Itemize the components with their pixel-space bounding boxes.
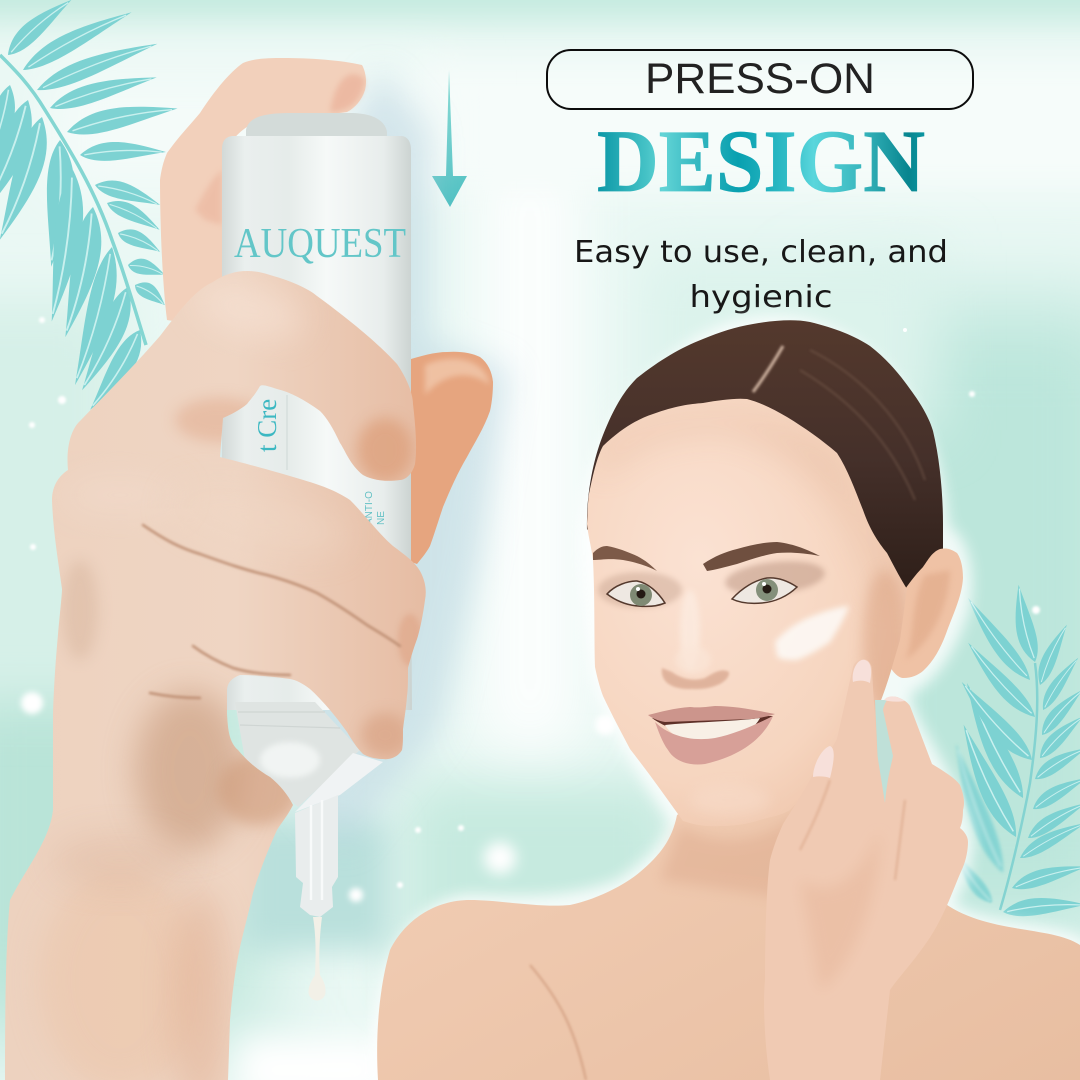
nozzle xyxy=(295,795,338,917)
bottle xyxy=(222,113,412,1000)
nose xyxy=(662,646,729,689)
subtitle: hygienic xyxy=(690,280,832,315)
clear bottle neck xyxy=(235,702,360,807)
ear xyxy=(890,548,963,678)
woman xyxy=(377,320,1080,1080)
bottle small print xyxy=(364,491,387,525)
gap between fingers xyxy=(875,700,895,810)
arrow: press down xyxy=(432,70,467,207)
chest crease xyxy=(530,965,586,1080)
hand on cheek xyxy=(764,659,968,1080)
label pill: PRESS-ON xyxy=(547,50,973,109)
leaf: right palm xyxy=(944,583,1080,918)
hair parting xyxy=(753,346,783,392)
eyebrows xyxy=(593,546,657,571)
hand front: fingers, palm and forearm xyxy=(5,271,426,1080)
bottle small print: ANTI-O xyxy=(364,491,375,525)
bottle brand: AUQUEST xyxy=(234,221,406,267)
hand shading xyxy=(800,830,880,990)
subtitle: Easy to use, clean, and xyxy=(574,235,948,270)
woman glow xyxy=(378,322,1080,1080)
face xyxy=(587,399,907,826)
leaf: top left palm xyxy=(0,0,179,417)
forehead shadow xyxy=(620,418,876,564)
under-eye cream xyxy=(775,606,849,660)
bottle label fragment: t Cre xyxy=(252,399,282,452)
hair xyxy=(587,320,943,595)
subtitle xyxy=(574,235,948,315)
eyes xyxy=(607,578,797,606)
hand back: thumb and fingertip behind bottle xyxy=(160,58,493,564)
finger creases xyxy=(143,525,400,698)
hand shading xyxy=(135,690,245,850)
lips xyxy=(648,706,775,764)
neck shadow xyxy=(660,810,800,900)
bottle cap xyxy=(246,113,387,140)
background sparkles xyxy=(21,317,1040,902)
body xyxy=(377,700,1080,1080)
fingernails xyxy=(853,660,871,683)
eye shadow xyxy=(598,572,682,608)
hand shadow xyxy=(200,70,510,850)
bottle small print: NE xyxy=(376,511,387,525)
cream drop xyxy=(308,917,326,1000)
label pill: PRESS-ON: PRESS-ON xyxy=(645,55,875,103)
heading: DESIGN: DESIGN xyxy=(597,113,925,211)
